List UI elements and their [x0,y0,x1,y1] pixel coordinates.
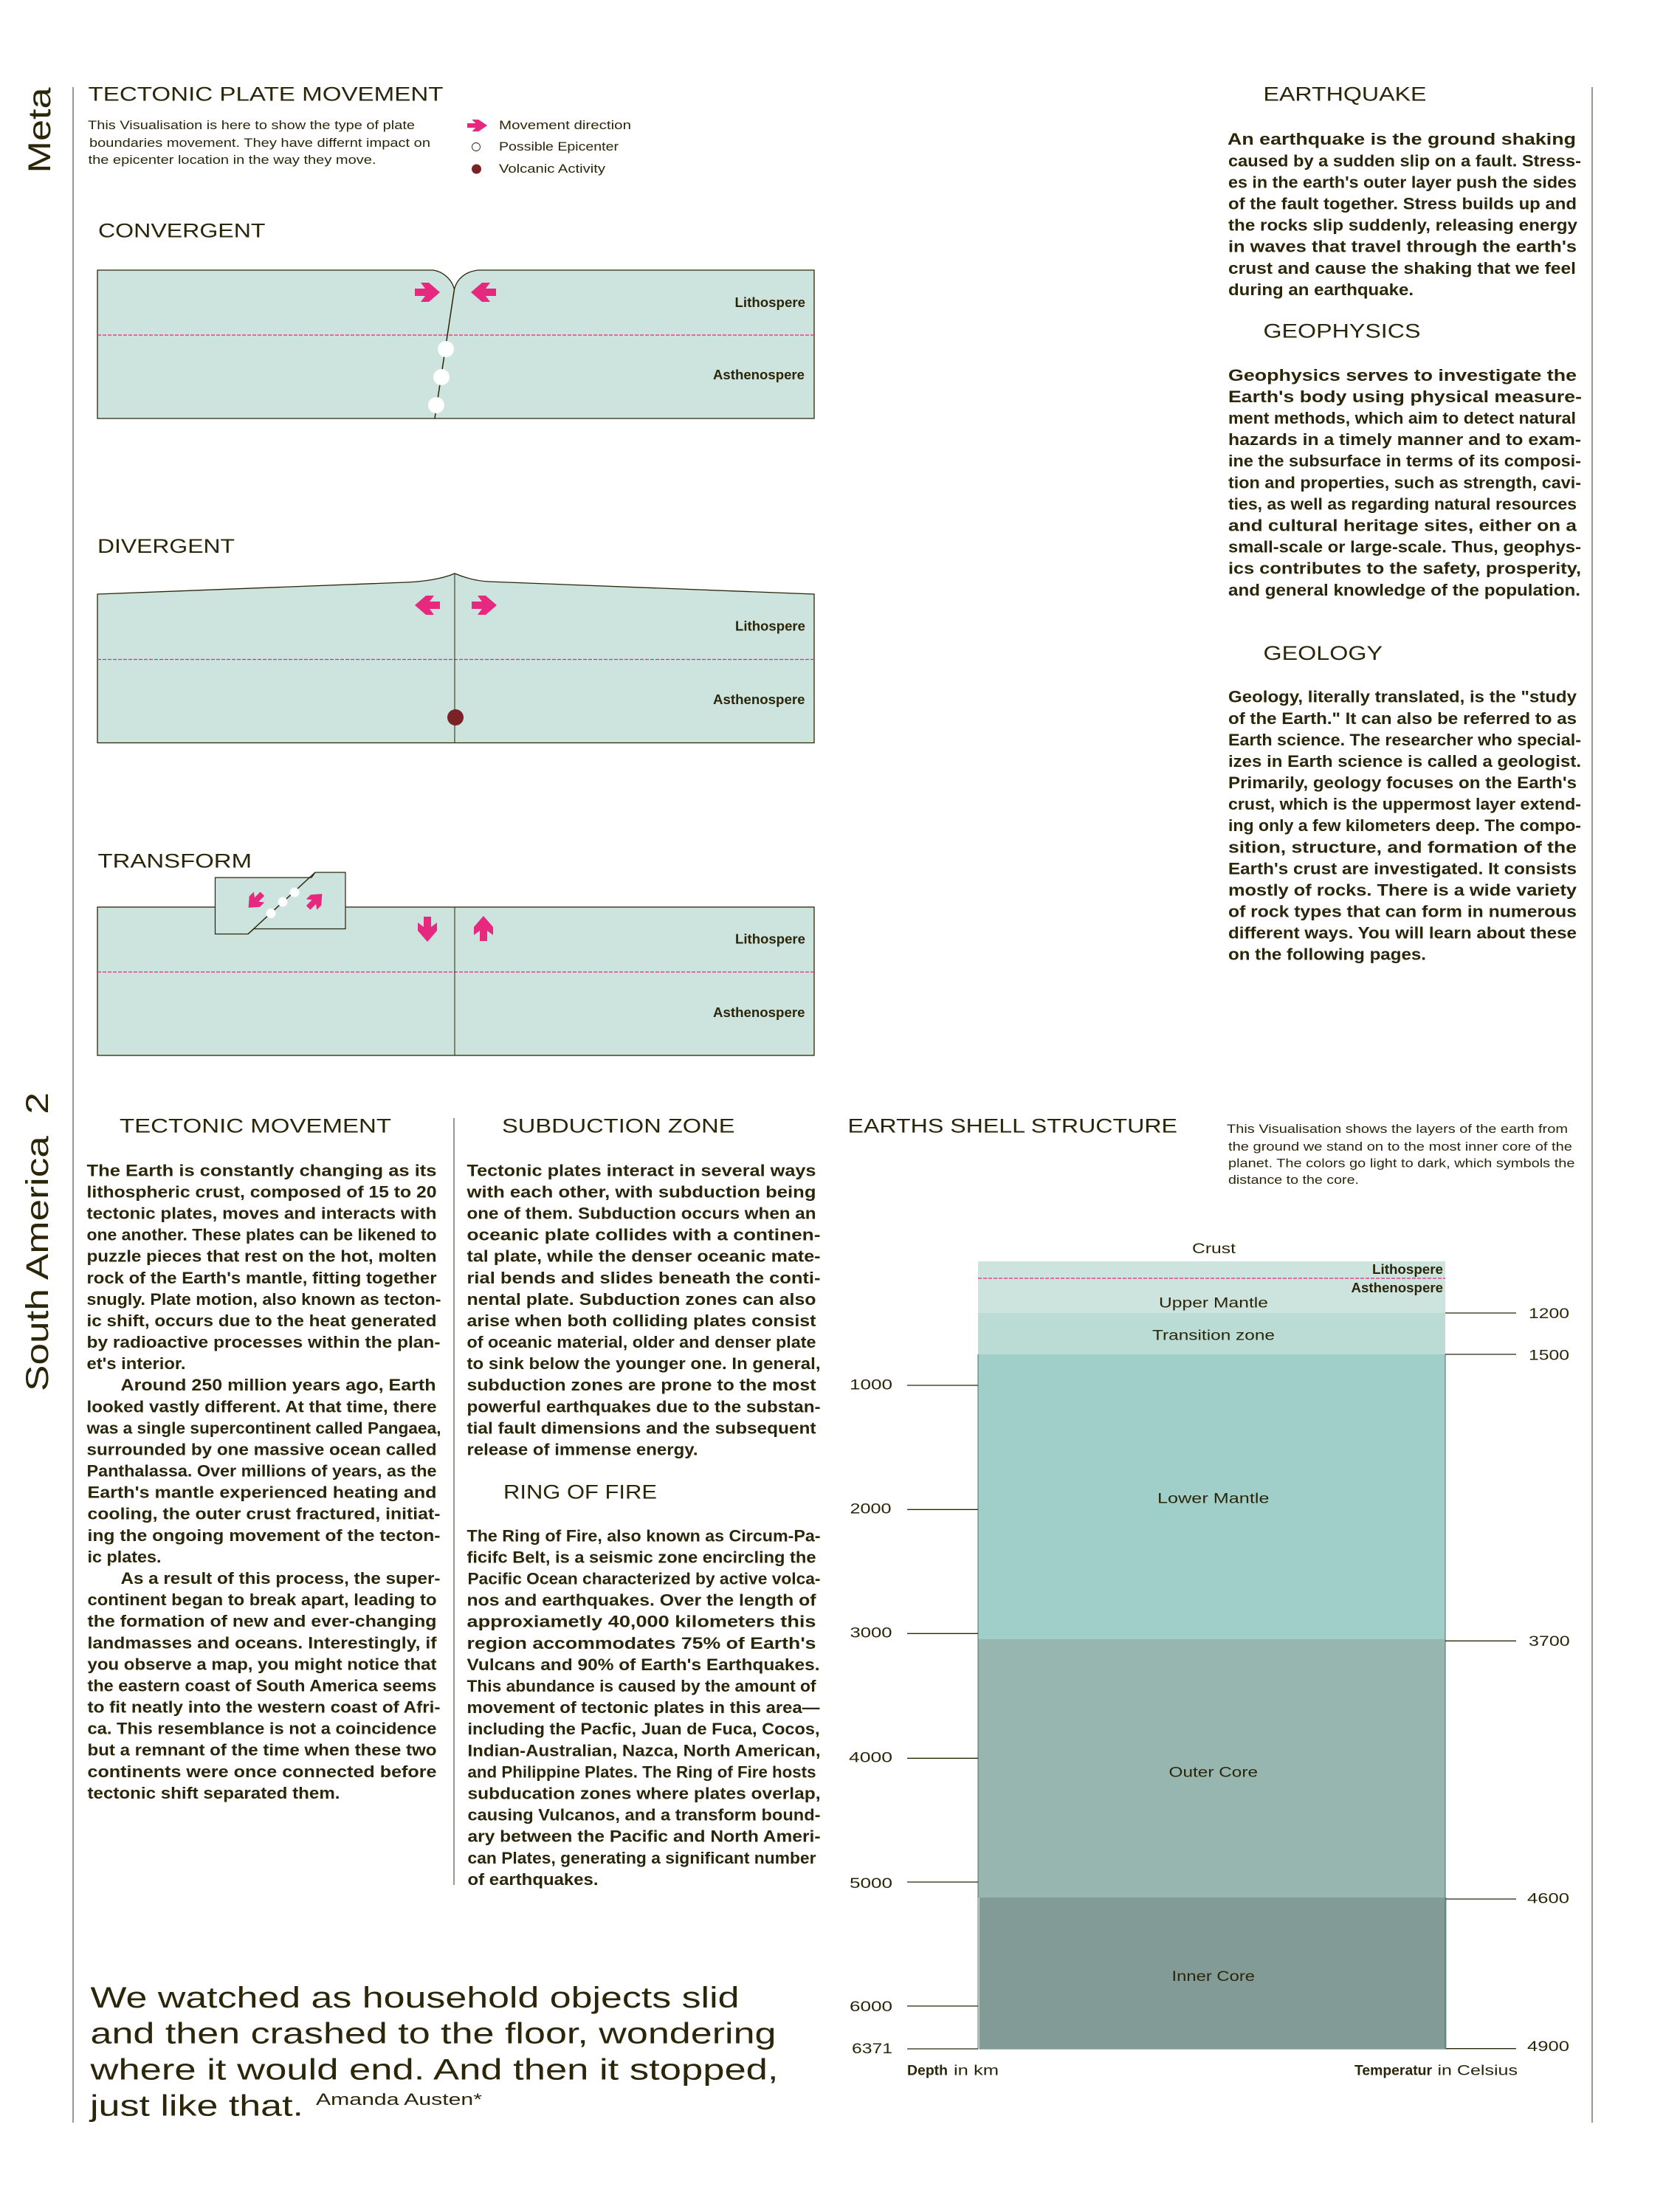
heading: tectonic movement: TECTONIC MOVEMENT [120,1114,391,1137]
text block: subduction zone: of oceanic material, older and denser plate [467,1333,816,1351]
text block: tectonic movement: Earth's mantle experienced heating and [87,1483,437,1502]
text block: geology: of the Earth." It can also be referred to as [1228,709,1577,728]
text block: tectonic movement: looked vastly different. At that time, there [87,1397,437,1416]
section label: Meta: Meta [22,87,58,173]
axis title: depth [907,2064,999,2079]
pull quote: and then crashed to the floor, wondering [90,2018,777,2050]
text block: tectonic movement: snugly. Plate motion, also known as tecton- [87,1290,441,1309]
text block: tectonic movement [86,1161,441,1802]
label: crust: Crust [1192,1241,1236,1257]
text block: tectonic movement: The Earth is constantly changing as its [87,1161,437,1179]
arrow: down [418,917,437,942]
heading: ring of fire: RING OF FIRE [503,1481,657,1503]
text block: subduction zone: with each other, with subduction being [466,1182,816,1201]
text block: shell structure description [1227,1122,1575,1187]
text block: earthquake: caused by a sudden slip on a fault. Stress- [1228,151,1581,170]
text block: geophysics: ics contributes to the safety, prosperity, [1228,559,1581,578]
axis: depth ticks: 6371 [852,2041,892,2057]
text block: geology: on the following pages. [1228,945,1426,964]
heading: convergent: CONVERGENT [98,220,266,242]
text block: tectonic movement: landmasses and oceans. Interestingly, if [87,1633,437,1652]
text block: geophysics: ties, as well as regarding natural resources [1228,494,1577,513]
text block: geology: crust, which is the uppermost layer extend- [1228,795,1581,813]
text block: subduction zone: arise when both colliding plates consist [467,1312,816,1330]
text block: tectonic movement: ing the ongoing movement of the tecton- [87,1526,440,1545]
text block: tectonic movement: surrounded by one massive ocean called [87,1441,437,1458]
heading: transform: TRANSFORM [97,850,252,872]
pull quote: We watched as household objects slid [90,1982,739,2014]
layer: inner core [979,1898,1447,2050]
text block: visualisation intro: This Visualisation is here to show the type of plate [88,118,415,132]
legend label: volcanic activity: Volcanic Activity [499,162,606,176]
text block: shell structure description: This Visualisation shows the layers of the earth from [1227,1122,1568,1136]
axis: depth ticks: 1000 [850,1378,892,1393]
panel: divergent diagram [97,573,814,742]
text block: ring of fire: subducation zones where plates overlap, [468,1785,821,1802]
text block: geology: Primarily, geology focuses on the Earth's [1228,773,1577,792]
text block: ring of fire: Pacific Ocean characterized by active volca- [468,1569,821,1588]
axis title: temperature: in Celsius [1438,2064,1518,2079]
text block: tectonic movement: lithospheric crust, composed of 15 to 20 [87,1182,437,1201]
text block: subduction zone: nental plate. Subduction zones can also [467,1290,816,1309]
text block: ring of fire: region accommodates 75% of Earth's [467,1634,816,1653]
text block: subduction zone: to sink below the younger one. In general, [467,1354,821,1373]
text block: subduction zone: rial bends and slides beneath the conti- [467,1269,821,1287]
axis: depth ticks: 3000 [850,1626,892,1641]
axis title: depth: Depth [907,2064,948,2079]
heading: subduction zone: SUBDUCTION ZONE [502,1114,735,1137]
panel: transform diagram [97,872,814,1055]
axis: depth ticks: 2000 [850,1502,892,1517]
label: inner core: Inner Core [1172,1969,1255,1985]
text block: ring of fire: causing Vulcanos, and a transform bound- [468,1806,821,1824]
section label: South America 2: South America 2 [20,1092,55,1391]
pull quote: where it would end. And then it stopped, [89,2053,779,2086]
heading: geophysics: GEOPHYSICS [1264,320,1420,342]
legend label: possible epicenter: Possible Epicenter [499,139,619,154]
text block: tectonic movement: continents were once connected before [87,1762,437,1781]
arrow: up [474,916,493,941]
label: lithospere: Lithospere [735,931,805,946]
text block: tectonic movement: ic shift, occurs due to the heat generated [87,1312,437,1330]
text block: ring of fire: of earthquakes. [468,1870,598,1889]
heading: earthquake: EARTHQUAKE [1264,83,1426,105]
icon: possible epicenter [472,143,480,151]
text block: shell structure description: the ground we stand on to the most inner core of the [1228,1140,1572,1154]
axis title: temperature [1354,2064,1518,2079]
text block: earthquake: of the fault together. Stress builds up and [1228,195,1577,213]
text block: tectonic movement: but a remnant of the time when these two [87,1741,437,1760]
title: tectonic plate movement: TECTONIC PLATE MOVEMENT [89,83,443,106]
text block: geophysics: ment methods, which aim to detect natural [1228,409,1576,427]
text block: subduction zone: powerful earthquakes due to the substan- [467,1397,821,1416]
axis title: temperature: Temperatur [1354,2064,1433,2079]
arrow: right [472,596,497,615]
legend label: movement direction: Movement direction [499,118,631,132]
heading: geology: GEOLOGY [1264,642,1383,664]
text block: geology: different ways. You will learn about these [1228,924,1577,942]
text block: geology: ing only a few kilometers deep. The compo- [1228,816,1581,835]
text block: earthquake [1228,130,1581,299]
legend [467,118,631,176]
text block: ring of fire: approxiametly 40,000 kilometers this [467,1613,816,1631]
text block: tectonic movement: one another. These plates can be likened to [87,1226,437,1244]
text block: tectonic movement: the formation of new and ever-changing [87,1612,437,1630]
volcanic activity [447,709,464,726]
layer: upper mantle [978,1261,1445,1313]
text block: tectonic movement: continent began to break apart, leading to [87,1591,437,1609]
text block: tectonic movement: the eastern coast of South America seems [87,1677,437,1695]
arrow: left [471,283,496,302]
text block: geophysics [1228,366,1582,599]
quote author: Amanda Austen* [316,2090,483,2109]
label: lithospere: Lithospere [1372,1262,1443,1277]
panel: convergent diagram [97,270,814,418]
text block: ring of fire: Indian-Australian, Nazca, North American, [468,1741,821,1760]
text block: tectonic movement: tectonic shift separated them. [87,1784,340,1802]
text block: geophysics: ine the subsurface in terms of its composi- [1228,452,1581,470]
text block: subduction zone: tial fault dimensions and the subsequent [467,1419,816,1437]
text block: subduction zone: subduction zones are prone to the most [467,1376,816,1394]
text block: tectonic movement: you observe a map, you might notice that [87,1655,437,1673]
heading: divergent: DIVERGENT [97,535,235,557]
pull quote [89,1982,778,2123]
text block: geology: Geology, literally translated, is the "study [1228,688,1577,706]
text block: earthquake: during an earthquake. [1228,280,1414,299]
axis: temperature ticks: 3700 [1529,1634,1570,1650]
text block: geology: sition, structure, and formation of the [1228,838,1577,856]
text block: visualisation intro [88,118,430,167]
text block: tectonic movement: was a single supercontinent called Pangaea, [86,1419,441,1437]
axis: depth ticks: 6000 [850,1999,892,2015]
text block: geology: Earth science. The researcher who special- [1228,731,1581,749]
text block: ring of fire: and Philippine Plates. The Ring of Fire hosts [468,1762,816,1781]
chart: earth shell layers [978,1241,1447,2050]
text block: ring of fire: ficifc Belt, is a seismic zone encircling the [467,1548,816,1566]
epicenters [428,341,454,413]
text block: tectonic movement: tectonic plates, moves and interacts with [87,1205,437,1222]
axis: temperature ticks: 1200 [1529,1306,1569,1322]
text block: geophysics: and cultural heritage sites, either on a [1228,517,1577,534]
arrow: left [415,596,440,615]
text block: subduction zone: one of them. Subduction occurs when an [467,1205,816,1222]
axis: temperature ticks: 4900 [1527,2039,1569,2055]
text block: subduction zone: oceanic plate collides with a continen- [467,1226,821,1244]
text block: ring of fire: ary between the Pacific and North Ameri- [468,1827,821,1846]
text block: geophysics: Geophysics serves to investigate the [1228,366,1577,385]
text block: ring of fire: nos and earthquakes. Over the length of [467,1591,816,1610]
icon: movement arrow [467,120,487,131]
axis: temperature ticks [1445,1306,1570,2055]
text block: earthquake: crust and cause the shaking that we feel [1228,259,1576,278]
text block: tectonic movement: Panthalassa. Over millions of years, as the [87,1462,437,1481]
axis: depth ticks [849,1378,978,2057]
text block: shell structure description: planet. The colors go light to dark, which symbols the [1228,1157,1575,1171]
text block: tectonic movement: cooling, the outer crust fractured, initiat- [87,1505,440,1523]
text block: ring of fire: The Ring of Fire, also known as Circum-Pa- [467,1526,821,1545]
text block: tectonic movement: by radioactive processes within the plan- [87,1333,440,1351]
pull quote: just like that. [89,2090,303,2123]
label: asthenospere: Asthenospere [713,692,805,707]
text block: geophysics: tion and properties, such as strength, cavi- [1228,473,1581,492]
text block: subduction zone: tal plate, while the denser oceanic mate- [467,1247,821,1266]
text block: geology: izes in Earth science is called a geologist. [1228,752,1581,771]
text block: geology: mostly of rocks. There is a wide variety [1228,881,1577,899]
text block: subduction zone: release of immense energy. [467,1441,698,1458]
text block: tectonic movement: ic plates. [87,1548,161,1566]
text block: tectonic movement: Around 250 million years ago, Earth [121,1376,436,1394]
axis: temperature ticks: 1500 [1529,1348,1569,1364]
text block: ring of fire [467,1526,821,1889]
text block: ring of fire: including the Pacfic, Juan de Fuca, Cocos, [468,1720,819,1738]
text block: ring of fire: This abundance is caused by the amount of [467,1677,816,1695]
label: outer core: Outer Core [1169,1765,1258,1780]
label: lithospere: Lithospere [735,618,805,633]
text block: geophysics: hazards in a timely manner and to exam- [1228,430,1581,449]
text block: earthquake: the rocks slip suddenly, releasing energy [1228,216,1578,235]
text block: tectonic movement: puzzle pieces that rest on the hot, molten [87,1247,437,1266]
text block: tectonic movement: rock of the Earth's mantle, fitting together [87,1269,437,1287]
text block: geology [1228,688,1581,964]
text block: tectonic movement: ca. This resemblance is not a coincidence [87,1720,437,1738]
axis: temperature ticks: 4600 [1527,1892,1569,1907]
text block: geophysics: small-scale or large-scale. Thus, geophys- [1228,538,1581,556]
label: lithospere: Lithospere [735,295,805,310]
text block: ring of fire: movement of tectonic plates in this area— [467,1698,819,1717]
label: lower mantle: Lower Mantle [1157,1492,1270,1507]
text block: ring of fire: can Plates, generating a significant number [468,1849,816,1867]
label: upper mantle: Upper Mantle [1159,1296,1268,1312]
layer: lower mantle [978,1354,1445,1639]
arrow: right [415,283,440,302]
text block: tectonic movement: As a result of this process, the super- [121,1569,440,1588]
text block: geology: Earth's crust are investigated. It consists [1228,859,1577,878]
axis title: depth: in km [954,2064,999,2079]
label: asthenospere: Asthenospere [713,368,805,382]
label: transition zone: Transition zone [1152,1328,1275,1344]
icon: volcanic activity [472,164,481,174]
heading: earths shell structure: EARTHS SHELL STRUCTURE [847,1114,1177,1137]
text block: visualisation intro: the epicenter location in the way they move. [89,153,376,167]
text block: tectonic movement: et's interior. [87,1354,186,1373]
axis: depth ticks: 5000 [850,1876,892,1892]
text block: tectonic movement: to fit neatly into the western coast of Afri- [87,1698,440,1717]
text block: earthquake: in waves that travel through the earth's [1228,238,1577,256]
text block: earthquake: es in the earth's outer layer push the sides [1228,173,1577,191]
text block: geology: of rock types that can form in numerous [1228,902,1577,921]
text block: geophysics: and general knowledge of the population. [1228,581,1580,599]
label: asthenospere: Asthenospere [713,1005,805,1020]
axis: depth ticks: 4000 [849,1751,892,1766]
layer: outer core [978,1639,1445,1898]
label: asthenospere: Asthenospere [1351,1281,1443,1295]
text block: visualisation intro: boundaries movement. They have differnt impact on [89,136,430,150]
text block: ring of fire: Vulcans and 90% of Earth's Earthquakes. [467,1655,819,1674]
text block: earthquake: An earthquake is the ground shaking [1228,130,1576,148]
text block: subduction zone: Tectonic plates interact in several ways [467,1161,816,1179]
text block: shell structure description: distance to the core. [1228,1173,1359,1187]
layer: transition zone [978,1313,1445,1354]
text block: subduction zone [466,1161,821,1458]
inset: top view of fault [216,872,345,934]
text block: geophysics: Earth's body using physical measure- [1228,387,1582,406]
